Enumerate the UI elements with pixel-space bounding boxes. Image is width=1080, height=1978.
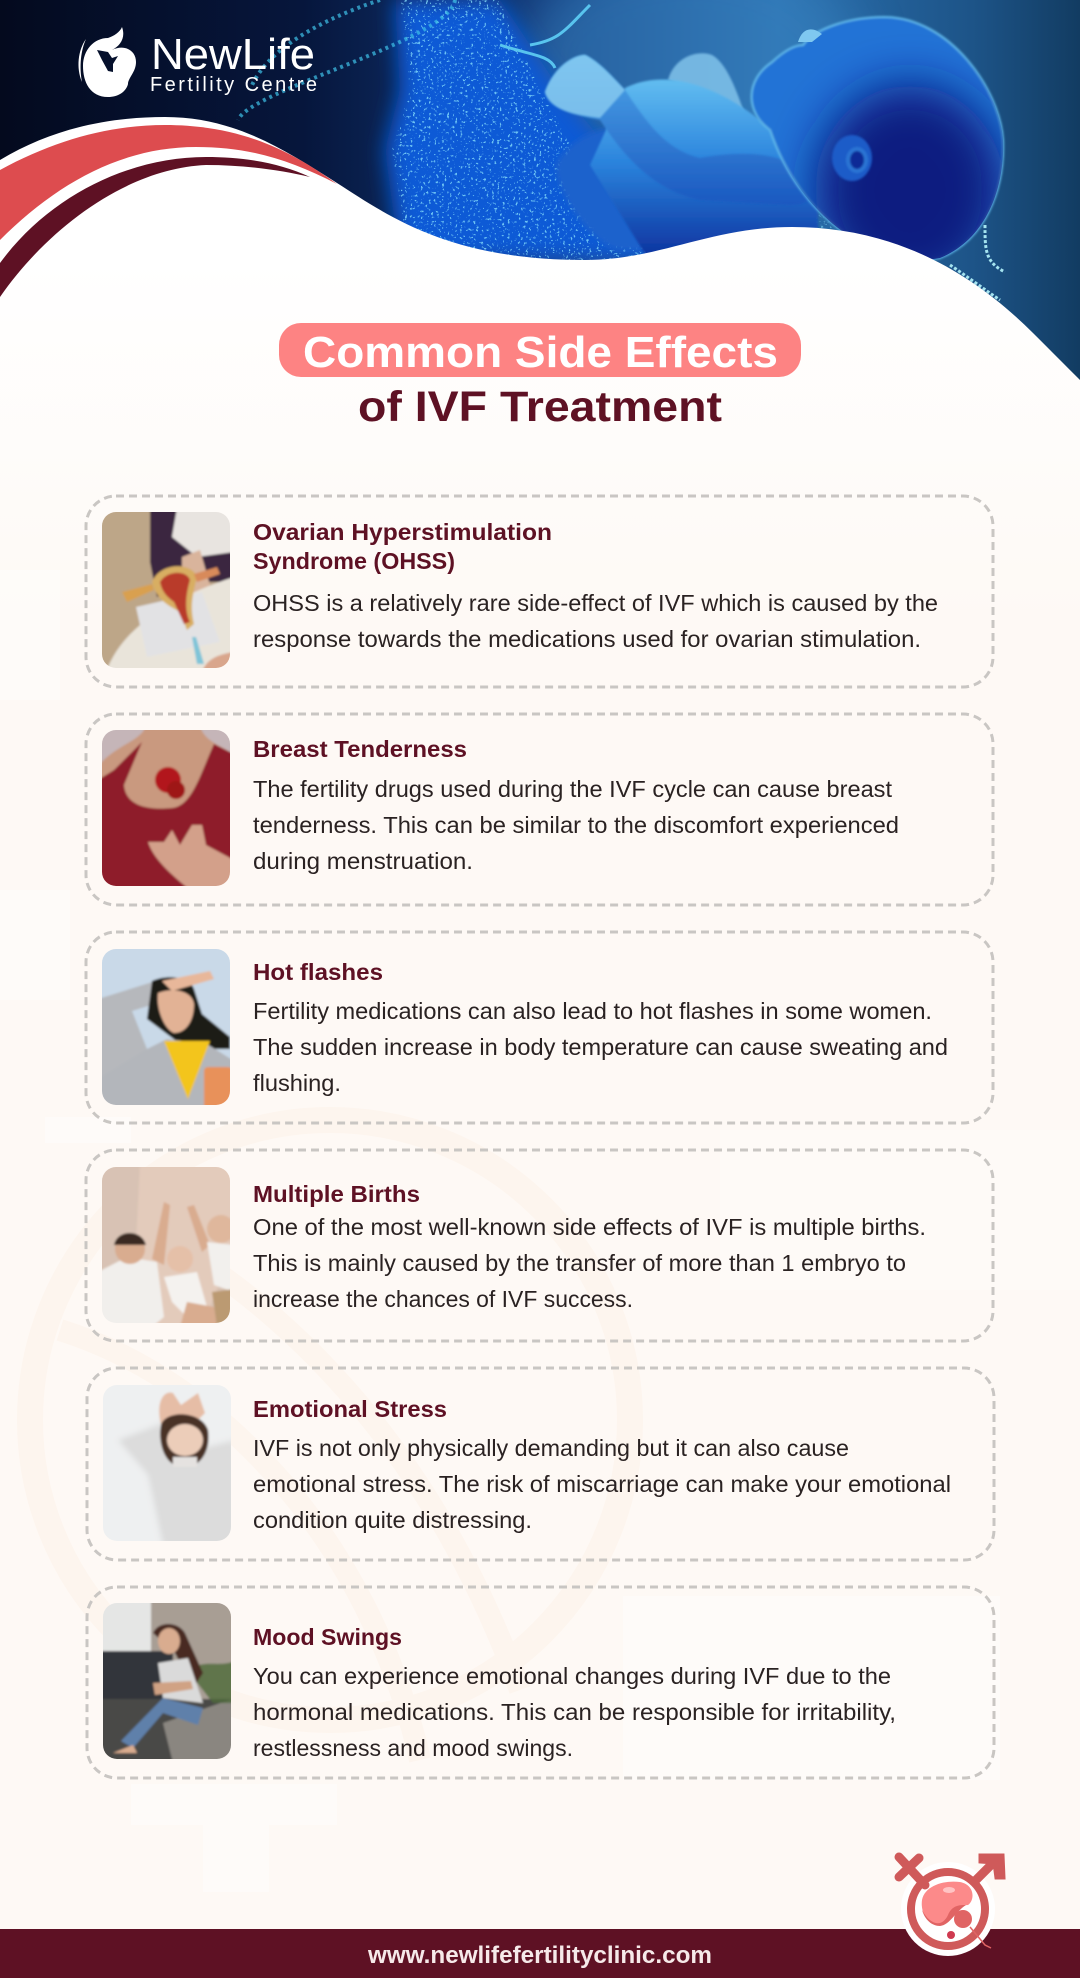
body text: increase the chances of IVF success. (253, 1286, 633, 1312)
heading: Mood Swings (253, 1624, 402, 1650)
maroon swoosh (0, 157, 310, 297)
body text: IVF is not only physically demanding but it can also cause (253, 1435, 849, 1461)
baby body (545, 53, 818, 262)
photo: uterus model (102, 512, 230, 668)
body text (253, 590, 938, 652)
footer bar (0, 1929, 1080, 1978)
body text (253, 776, 899, 874)
body text: restlessness and mood swings. (253, 1735, 573, 1761)
heading: Ovarian Hyperstimulation (253, 519, 552, 545)
red swoosh (0, 125, 337, 240)
body text (253, 1435, 951, 1533)
body text: The sudden increase in body temperature can cause sweating and (253, 1034, 948, 1060)
panel: mood swings (87, 1587, 994, 1778)
heading: Breast Tenderness (253, 736, 467, 762)
panel: emotional stress (87, 1368, 994, 1560)
photo: three babies (102, 1167, 230, 1323)
header image: glowing fetus (0, 0, 1080, 400)
body text: OHSS is a relatively rare side-effect of IVF which is caused by the (253, 590, 938, 616)
body text: hormonal medications. This can be responsible for irritability, (253, 1699, 896, 1725)
body text: This is mainly caused by the transfer of more than 1 embryo to (253, 1250, 906, 1276)
body text: condition quite distressing. (253, 1507, 532, 1533)
title line 1: Common Side Effects (303, 328, 778, 377)
heading line 2: Syndrome (OHSS) (253, 548, 455, 574)
heading: Emotional Stress (253, 1396, 447, 1422)
website url: www.newlifefertilityclinic.com (367, 1942, 712, 1969)
heading: Multiple Births (253, 1181, 420, 1207)
body text: One of the most well-known side effects of IVF is multiple births. (253, 1214, 926, 1240)
photo: stressed woman (103, 1385, 231, 1541)
panel: breast tenderness (86, 714, 993, 905)
body text: emotional stress. The risk of miscarriage can make your emotional (253, 1471, 951, 1497)
body text (253, 1214, 926, 1312)
body text (253, 1663, 896, 1761)
body text: Fertility medications can also lead to hot flashes in some women. (253, 998, 932, 1024)
body text: The fertility drugs used during the IVF cycle can cause breast (253, 776, 893, 802)
photo: woman wiping forehead (102, 949, 230, 1105)
logo (79, 27, 317, 97)
particle column (238, 0, 860, 262)
body text (253, 998, 948, 1096)
heading: Hot flashes (253, 959, 383, 985)
title (279, 323, 801, 431)
body text: You can experience emotional changes during IVF due to the (253, 1663, 891, 1689)
body text: flushing. (253, 1070, 341, 1096)
panel: multiple births (86, 1150, 993, 1341)
icon: gender symbol with egg and sperm (899, 1855, 1004, 1956)
icon: mother and baby (79, 27, 136, 97)
panel: OHSS (86, 496, 993, 687)
panel: hot flashes (86, 932, 993, 1123)
body text: response towards the medications used for ovarian stimulation. (253, 626, 921, 652)
background watermark: DNA and crosses (0, 570, 1080, 1892)
photo: red top with flower (102, 730, 230, 886)
logo wordmark: NewLife (151, 30, 315, 79)
title line 2: of IVF Treatment (358, 383, 722, 431)
title pill (279, 323, 801, 377)
logo tagline: Fertility Centre (150, 74, 317, 96)
photo: woman sitting on floor (103, 1603, 231, 1759)
baby head (750, 14, 1006, 261)
body text: during menstruation. (253, 848, 473, 874)
body text: tenderness. This can be similar to the discomfort experienced (253, 812, 899, 838)
